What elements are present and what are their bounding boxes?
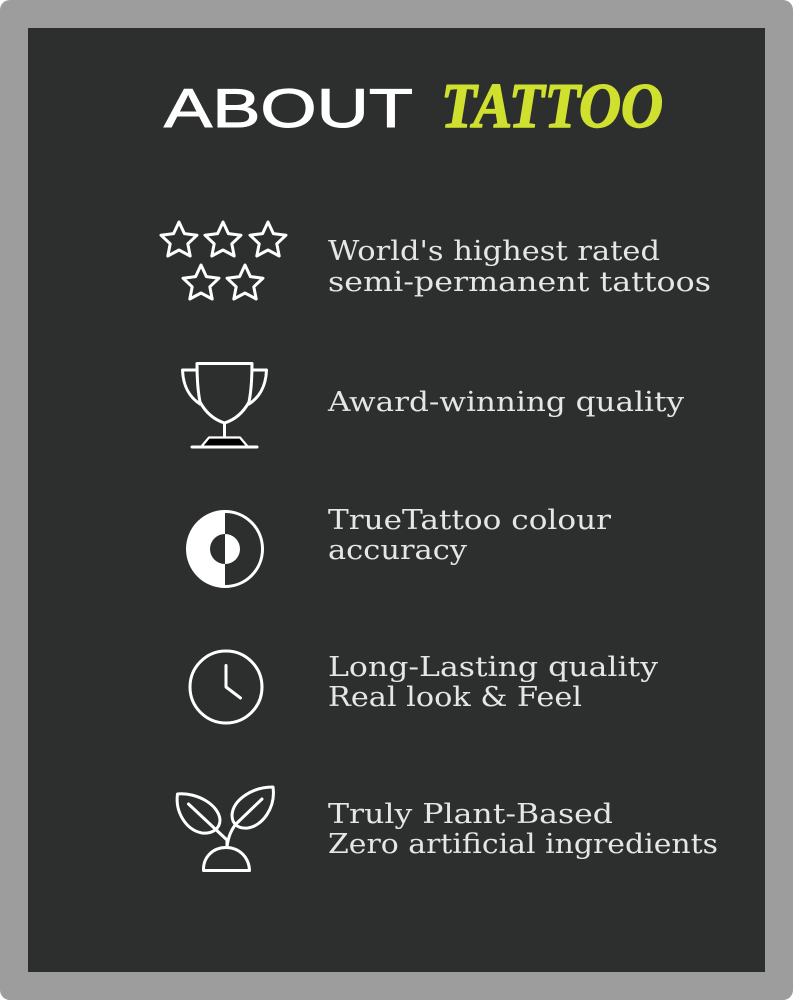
title: ABOUT — [164, 77, 413, 139]
text: plant-based — [328, 799, 718, 860]
icon: five stars — [161, 222, 286, 299]
text: plant-based: Zero artificial ingredients — [328, 829, 718, 860]
text: colour accuracy — [328, 505, 611, 566]
text: colour accuracy: accuracy — [328, 535, 468, 566]
text: highest rated: World's highest rated — [328, 236, 660, 267]
text: long-lasting — [328, 652, 659, 713]
text: highest rated — [328, 236, 711, 298]
icon: trophy — [182, 364, 266, 447]
title: TATTOO — [441, 70, 663, 141]
text: award-winning: Award-winning quality — [327, 387, 685, 418]
icon: plant — [177, 787, 273, 870]
title — [164, 70, 663, 141]
text: long-lasting: Long-Lasting quality — [328, 652, 659, 683]
text: long-lasting: Real look & Feel — [328, 682, 582, 713]
icon: colour accuracy — [186, 510, 262, 588]
text: highest rated: semi-permanent tattoos — [328, 267, 711, 298]
text: colour accuracy: TrueTattoo colour — [328, 505, 611, 536]
icon: clock — [190, 651, 262, 723]
text: plant-based: Truly Plant-Based — [328, 799, 613, 830]
